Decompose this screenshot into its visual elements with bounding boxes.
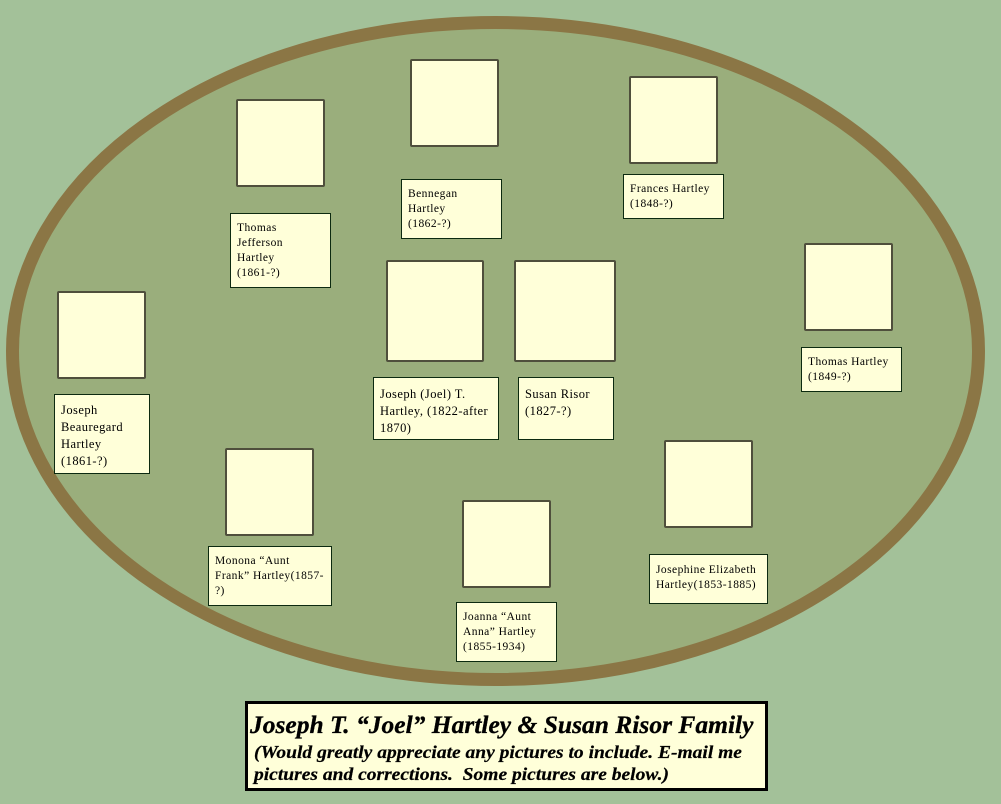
label: Monona Hartley	[208, 546, 332, 606]
label: Joseph Beauregard Hartley: Hartley	[61, 437, 102, 451]
label: Joanna Hartley: (1855-1934)	[463, 641, 525, 653]
label: Joseph Beauregard Hartley: Beauregard	[61, 420, 123, 434]
label: Thomas Jefferson Hartley	[230, 213, 331, 288]
label: Thomas Jefferson Hartley: (1861-?)	[237, 267, 280, 279]
label: Susan Risor	[518, 377, 614, 440]
label: Joseph (Joel) T. Hartley: Hartley, (1822-after	[380, 404, 488, 418]
label: Joseph (Joel) T. Hartley: Joseph (Joel) T.	[380, 387, 466, 401]
label: Joanna Hartley: Anna” Hartley	[463, 626, 536, 638]
label: Monona Hartley: Monona “Aunt	[215, 555, 290, 567]
label: Joseph Beauregard Hartley: (1861-?)	[61, 454, 108, 468]
subtitle note: (Would greatly appreciate any pictures to include. E-mail me	[254, 742, 742, 762]
label: Joseph (Joel) T. Hartley	[373, 377, 499, 440]
photo frame: Joanna Hartley	[462, 500, 551, 588]
label: Monona Hartley: Frank” Hartley(1857-	[215, 570, 324, 582]
label: Joseph Beauregard Hartley: Joseph	[61, 403, 98, 417]
photo frame: Thomas Jefferson Hartley	[236, 99, 325, 187]
label: Bennegan Hartley	[401, 179, 502, 239]
title: Joseph T. “Joel” Hartley & Susan Risor Family	[250, 710, 753, 739]
label: Monona Hartley: ?)	[215, 585, 225, 597]
label: Thomas Jefferson Hartley: Jefferson	[237, 237, 283, 249]
photo frame: Joseph Beauregard Hartley	[57, 291, 146, 379]
label: Thomas Hartley: (1849-?)	[808, 371, 851, 383]
label: Susan Risor: Susan Risor	[525, 387, 590, 401]
label: Bennegan Hartley: (1862-?)	[408, 218, 451, 230]
label: Joanna Hartley: Joanna “Aunt	[463, 611, 531, 623]
label: Thomas Jefferson Hartley: Thomas	[237, 222, 277, 234]
label: Frances Hartley: Frances Hartley	[630, 183, 710, 195]
photo frame: Susan Risor	[514, 260, 616, 362]
label: Josephine Elizabeth Hartley: Josephine Elizabeth	[656, 564, 756, 576]
label: Josephine Elizabeth Hartley	[649, 554, 768, 604]
label: Thomas Jefferson Hartley: Hartley	[237, 252, 275, 264]
label: Thomas Hartley: Thomas Hartley	[808, 356, 889, 368]
label: Joanna Hartley	[456, 602, 557, 662]
subtitle note: pictures and corrections. Some pictures are below.)	[254, 764, 669, 784]
photo frame: Joseph (Joel) T. Hartley	[386, 260, 484, 362]
label: Thomas Hartley	[801, 347, 902, 392]
subtitle note	[252, 742, 742, 784]
photo frame: Josephine Elizabeth Hartley	[664, 440, 753, 528]
title box	[245, 701, 768, 791]
label: Josephine Elizabeth Hartley: Hartley(1853-1885)	[656, 579, 756, 591]
label: Joseph Beauregard Hartley	[54, 394, 150, 474]
label: Bennegan Hartley: Hartley	[408, 203, 446, 215]
photo frame: Monona Hartley	[225, 448, 314, 536]
photo frame: Bennegan Hartley	[410, 59, 499, 147]
photo frame: Frances Hartley	[629, 76, 718, 164]
label: Frances Hartley	[623, 174, 724, 219]
label: Bennegan Hartley: Bennegan	[408, 188, 458, 200]
label: Joseph (Joel) T. Hartley: 1870)	[380, 421, 411, 435]
photo frame: Thomas Hartley	[804, 243, 893, 331]
label: Frances Hartley: (1848-?)	[630, 198, 673, 210]
label: Susan Risor: (1827-?)	[525, 404, 572, 418]
